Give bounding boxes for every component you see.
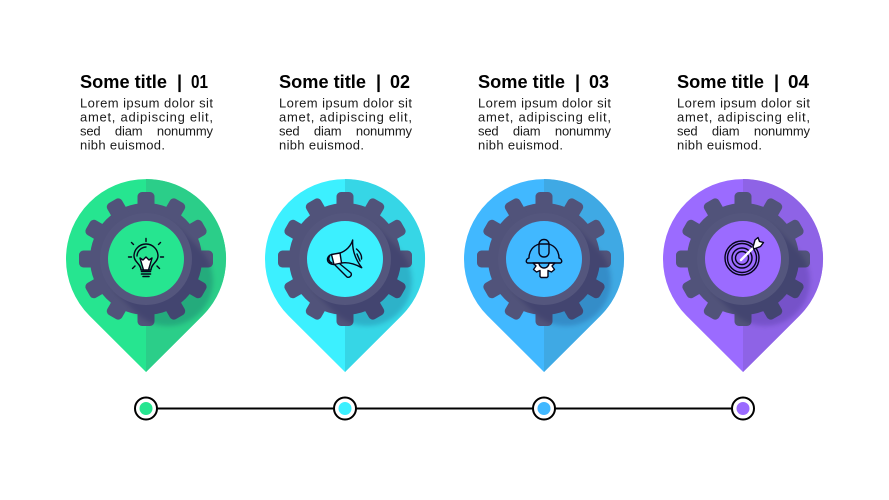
- heading: step 4: |: [774, 72, 779, 92]
- panel: step 2 text: [279, 72, 412, 152]
- pin: blue with gear and helmet: [464, 179, 624, 372]
- pin: cyan with gear and megaphone: [265, 179, 425, 372]
- pin: green with gear and bulb: [66, 179, 226, 372]
- icon: megaphone: [327, 240, 362, 277]
- text block: step 3: sed diam nonummy: [478, 124, 612, 138]
- heading: step 2: |: [376, 72, 381, 92]
- text block: step 1: [80, 96, 214, 152]
- heading: step 1: [80, 72, 208, 92]
- text block: step 2: Lorem ipsum dolor sit: [279, 96, 412, 110]
- text block: step 3: nibh euismod.: [478, 138, 563, 152]
- heading: step 1: 01: [191, 72, 208, 92]
- heading: step 1: Some title: [80, 72, 167, 92]
- text block: step 3: amet, adipiscing elit,: [478, 110, 611, 124]
- timeline: [135, 398, 754, 420]
- text block: step 1: Lorem ipsum dolor sit: [80, 96, 213, 110]
- text block: step 1: amet, adipiscing elit,: [80, 110, 213, 124]
- text block: step 2: nibh euismod.: [279, 138, 364, 152]
- text block: step 4: sed diam nonummy: [677, 124, 810, 138]
- heading: step 4: [677, 72, 809, 92]
- text block: step 2: sed diam nonummy: [279, 124, 412, 138]
- text block: step 2: [279, 96, 412, 152]
- heading: step 1: |: [177, 72, 182, 92]
- heading: step 4: Some title: [677, 72, 764, 92]
- marker: step 2: [334, 398, 356, 420]
- text block: step 3: [478, 96, 612, 152]
- heading: step 3: |: [575, 72, 580, 92]
- heading: step 3: Some title: [478, 72, 565, 92]
- icon: helmet on gear: [526, 240, 562, 278]
- text block: step 3: Lorem ipsum dolor sit: [478, 96, 611, 110]
- heading: step 4: 04: [788, 72, 809, 92]
- marker: step 1: [135, 398, 157, 420]
- panel: step 1 text: [80, 72, 214, 152]
- heading: step 3: [478, 72, 609, 92]
- panel: step 4 text: [677, 72, 810, 152]
- text block: step 4: amet, adipiscing elit,: [677, 110, 810, 124]
- panel: step 3 text: [478, 72, 612, 152]
- marker: step 4: [732, 398, 754, 420]
- heading: step 2: [279, 72, 410, 92]
- icon: light bulb: [128, 238, 164, 276]
- text block: step 4: Lorem ipsum dolor sit: [677, 96, 810, 110]
- icon: target with arrow: [725, 238, 764, 275]
- heading: step 2: 02: [390, 72, 410, 92]
- text block: step 1: sed diam nonummy: [80, 124, 214, 138]
- text block: step 4: nibh euismod.: [677, 138, 762, 152]
- heading: step 3: 03: [589, 72, 609, 92]
- text block: step 2: amet, adipiscing elit,: [279, 110, 412, 124]
- text block: step 4: [677, 96, 810, 152]
- heading: step 2: Some title: [279, 72, 366, 92]
- pin: purple with gear and target: [663, 179, 823, 372]
- marker: step 3: [533, 398, 555, 420]
- text block: step 1: nibh euismod.: [80, 138, 165, 152]
